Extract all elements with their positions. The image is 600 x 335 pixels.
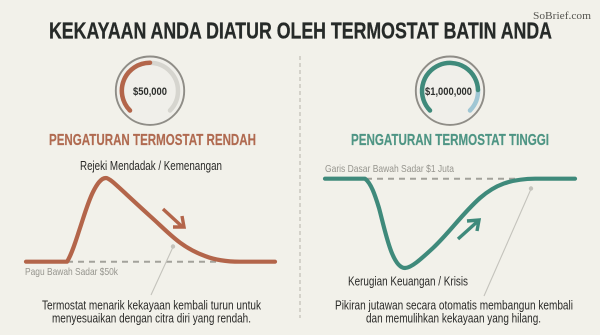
caption: high thermostat — [335, 298, 573, 326]
label: financial loss: Kerugian Keuangan / Krisis — [348, 274, 468, 288]
caption: low thermostat — [42, 298, 261, 326]
caption: high thermostat: dan memulihkan kekayaan yang hilang. — [366, 310, 541, 326]
subconscious ceiling dashed line — [67, 261, 216, 263]
leader line — [151, 244, 175, 295]
watermark: SoBrief.com — [533, 11, 591, 22]
gauge: low setting — [116, 56, 184, 125]
arrow: falling — [163, 209, 184, 227]
heading: low thermostat: PENGATURAN TERMOSTAT RENDAH — [49, 132, 256, 149]
arrow: rising — [458, 220, 479, 239]
gauge: high setting — [416, 56, 484, 125]
chart: high curve — [325, 179, 575, 268]
label: windfall: Rejeki Mendadak / Kemenangan — [80, 158, 222, 173]
label: subconscious baseline: Garis Dasar Bawah Sadar $1 Juta — [325, 163, 454, 175]
gauge: low setting: $50,000 — [133, 86, 167, 98]
caption: low thermostat: menyesuaikan dengan citra diri yang rendah. — [52, 310, 251, 326]
panel: high thermostat — [325, 56, 575, 325]
panel: low thermostat — [25, 56, 275, 325]
leader line — [484, 186, 533, 296]
subconscious baseline dashed line — [366, 178, 520, 180]
label: subconscious ceiling: Pagu Bawah Sadar $50k — [25, 266, 119, 278]
gauge: high setting: $1,000,000 — [425, 86, 472, 98]
caption: low thermostat: Termostat menarik kekayaan kembali turun untuk — [42, 298, 261, 312]
chart: low curve — [26, 178, 275, 262]
